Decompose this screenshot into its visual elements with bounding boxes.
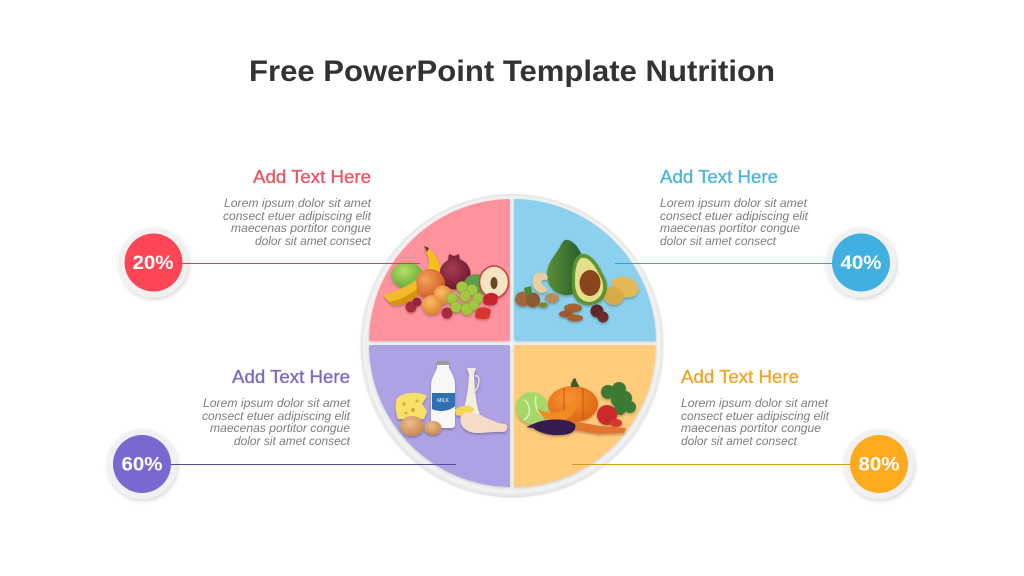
- percentage: 60%: [122, 454, 163, 476]
- body text: consect etuer adipiscing elit: [202, 411, 351, 423]
- connector line: [572, 464, 853, 465]
- connector line: [615, 263, 835, 264]
- body text: maecenas portitor congue: [660, 223, 800, 235]
- heading: Add Text Here: [681, 367, 799, 387]
- icon: avocado and nuts: [515, 240, 642, 322]
- body text: dolor sit amet consect: [234, 436, 351, 448]
- badge: [832, 234, 890, 292]
- body text: consect etuer adipiscing elit: [660, 211, 809, 223]
- percentage: 20%: [132, 253, 174, 274]
- body text: dolor sit amet consect: [681, 436, 798, 448]
- body text: consect etuer adipiscing elit: [223, 211, 372, 223]
- quadrant: fruits: [369, 199, 510, 341]
- badge: [850, 435, 908, 493]
- body text: consect etuer adipiscing elit: [681, 411, 830, 423]
- callout: 60%: [107, 367, 456, 499]
- badge: [113, 435, 171, 493]
- body text: dolor sit amet consect: [255, 236, 372, 248]
- badge ring: [118, 228, 188, 298]
- percentage: 40%: [840, 253, 882, 274]
- title: Free PowerPoint Template Nutrition: [249, 55, 775, 88]
- quadrant: vegetables: [514, 345, 656, 487]
- badge: [124, 234, 182, 292]
- connector line: [168, 464, 456, 465]
- callout: 20%: [118, 167, 420, 298]
- body text: [660, 198, 809, 248]
- callout: 40%: [615, 167, 896, 298]
- body text: dolor sit amet consect: [660, 236, 777, 248]
- body text: Lorem ipsum dolor sit amet: [224, 198, 372, 210]
- body text: Lorem ipsum dolor sit amet: [681, 398, 829, 410]
- heading: Add Text Here: [660, 167, 778, 187]
- plate rim: [362, 195, 662, 495]
- body text: Lorem ipsum dolor sit amet: [660, 198, 808, 210]
- icon: vegetables: [516, 378, 636, 435]
- badge ring: [844, 429, 914, 499]
- callout: 80%: [572, 367, 914, 499]
- heading: Add Text Here: [253, 167, 371, 187]
- body text: maecenas portitor congue: [681, 423, 821, 435]
- icon: dairy and protein: [396, 361, 507, 436]
- body text: [681, 398, 830, 448]
- quadrant: fats and nuts: [514, 199, 656, 341]
- icon: dairy and protein: MILK: [437, 398, 449, 404]
- body text: maecenas portitor congue: [210, 423, 350, 435]
- quadrant: dairy and protein: [369, 345, 510, 487]
- badge ring: [826, 228, 896, 298]
- badge ring: [107, 429, 177, 499]
- percentage: 80%: [858, 454, 900, 476]
- body text: Lorem ipsum dolor sit amet: [203, 398, 351, 410]
- body text: [223, 198, 372, 248]
- plate chart: [362, 195, 662, 495]
- body text: [202, 398, 351, 448]
- heading: Add Text Here: [232, 367, 350, 387]
- body text: maecenas portitor congue: [231, 223, 371, 235]
- connector line: [180, 263, 420, 264]
- icon: fruits: [383, 246, 508, 319]
